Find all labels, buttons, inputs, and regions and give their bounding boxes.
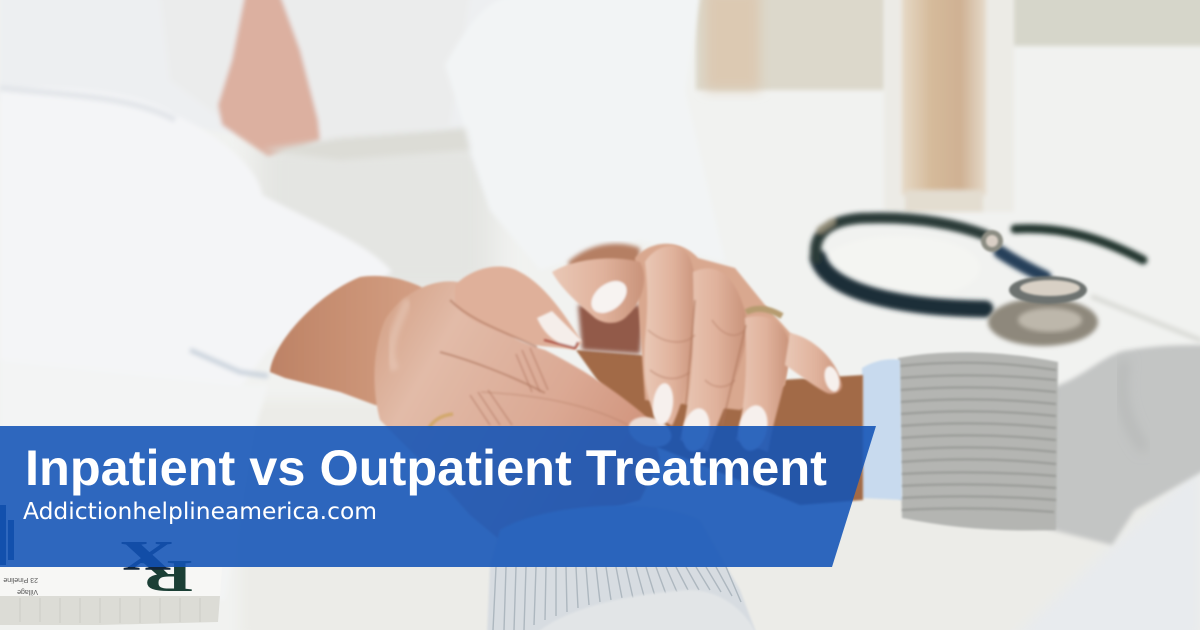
patient wrist xyxy=(576,350,863,505)
sweater cuff xyxy=(862,352,1058,530)
striped cuff, bottom sleeve xyxy=(487,506,757,630)
hidden patient hand above fingers xyxy=(568,244,640,272)
back of the holding hand xyxy=(635,244,792,410)
prescription notepad: 23 Pineline xyxy=(3,576,38,583)
stethoscope xyxy=(816,218,1200,346)
white coat torso xyxy=(0,0,725,270)
back hand fingers xyxy=(644,246,842,452)
banner website: Addictionhelplineamerica.com xyxy=(23,499,377,525)
front hand nails and ring xyxy=(429,311,675,452)
sweater body xyxy=(1010,345,1200,630)
prescription notepad xyxy=(0,505,224,625)
prescription notepad: x xyxy=(121,528,172,595)
prescription notepad: R xyxy=(139,551,193,601)
white coat left sleeve xyxy=(0,87,392,600)
front hand xyxy=(270,266,660,540)
back hand nails xyxy=(651,365,842,454)
shadow between fingers xyxy=(578,305,645,354)
curled finger xyxy=(552,258,644,323)
blue banner xyxy=(0,426,876,567)
prescription notepad: Village xyxy=(17,588,38,595)
banner title: Inpatient vs Outpatient Treatment xyxy=(25,440,827,496)
glass with sticks xyxy=(884,0,1014,212)
